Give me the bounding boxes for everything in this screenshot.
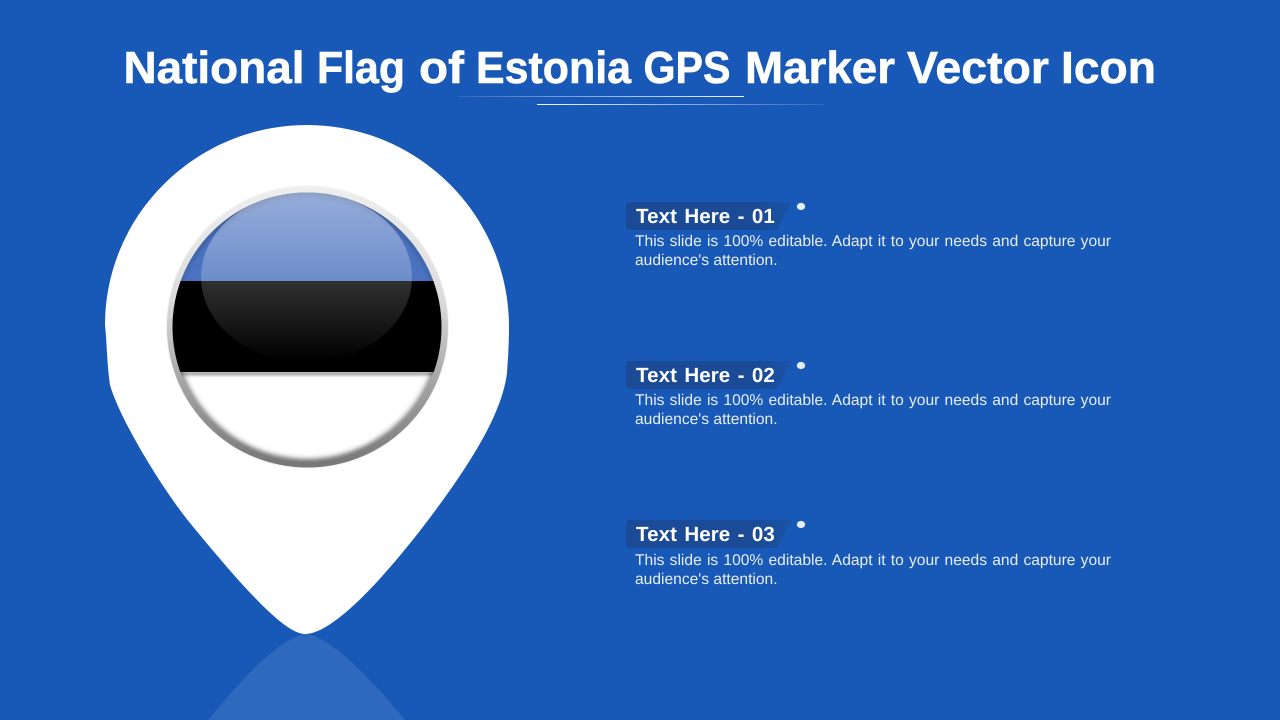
description 01: This slide is 100% editable. Adapt it to your needs and capture your audience's attention. — [635, 233, 1111, 269]
title: of — [419, 42, 465, 93]
label tag 03 — [626, 520, 806, 548]
title: Estonia — [476, 42, 632, 93]
marker pin body — [105, 125, 509, 634]
flag badge — [166, 186, 448, 468]
heading 01: Text Here - 01 — [636, 205, 775, 228]
title: Icon — [1061, 42, 1156, 93]
title: Marker — [745, 42, 895, 93]
marker reflection — [208, 634, 405, 720]
heading 03: Text Here - 03 — [636, 523, 775, 546]
flag stripes — [170, 190, 445, 464]
icon: GPS marker with Estonian flag — [105, 125, 509, 720]
title — [124, 42, 1156, 93]
glass highlight — [201, 192, 412, 362]
title: National — [124, 42, 304, 93]
title: Vector — [907, 42, 1049, 93]
description 02: This slide is 100% editable. Adapt it to your needs and capture your audience's attention. — [635, 392, 1111, 428]
title underlines — [458, 96, 824, 105]
text block 02 — [626, 361, 1111, 428]
badge ring — [166, 186, 448, 468]
title: Flag — [317, 42, 405, 93]
label tag 02 — [626, 361, 806, 389]
heading 02: Text Here - 02 — [636, 364, 775, 387]
text block 03 — [626, 520, 1111, 588]
label tag 01 — [626, 202, 806, 230]
description 03: This slide is 100% editable. Adapt it to your needs and capture your audience's attention. — [635, 552, 1111, 588]
title: GPS — [644, 42, 730, 93]
text block 01 — [626, 202, 1111, 269]
